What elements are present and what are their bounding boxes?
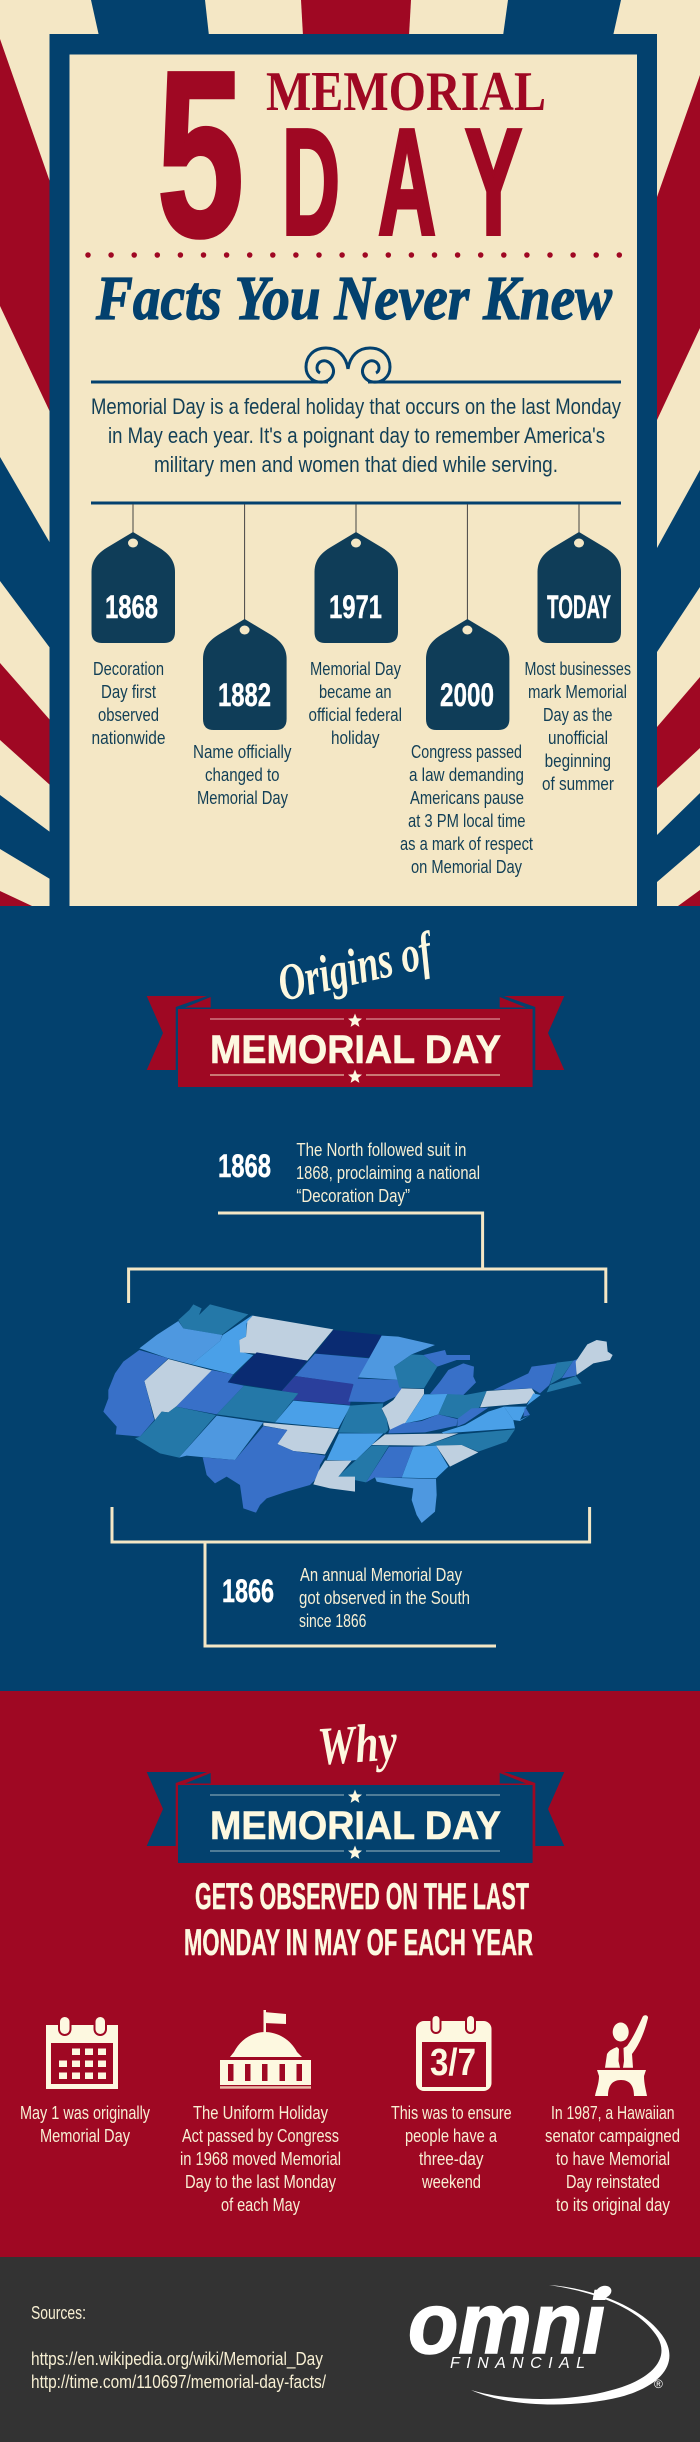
timeline item: 1882: Name officially (193, 742, 292, 762)
timeline item: 1882: changed to (205, 765, 280, 785)
text block: hawaiian senator: to have Memorial (556, 2149, 670, 2169)
callout: 1866: An annual Memorial Day (300, 1565, 462, 1585)
text block: introduction: military men and women that died while serving. (154, 452, 558, 477)
banner: Memorial Day (red): MEMORIAL DAY (210, 1028, 501, 1072)
text block: hawaiian senator: Day reinstated (566, 2172, 660, 2192)
panel: title frame (50, 34, 657, 914)
timeline item: today: beginning (545, 751, 611, 771)
banner: Memorial Day (blue) (147, 1772, 564, 1863)
icon: calendar 3/7 (416, 2015, 492, 2091)
heading: DAY: Y (465, 97, 522, 266)
timeline item: today: unofficial (548, 728, 608, 748)
timeline item: 2000: 2000 (440, 677, 494, 713)
timeline item: 1868: Day first (101, 682, 156, 702)
callout: 1868: 1868 (218, 1148, 271, 1184)
text block: three-day weekend (391, 2103, 512, 2192)
text block: three-day weekend: weekend (421, 2172, 481, 2192)
timeline item: 2000: Americans pause (410, 788, 524, 808)
text block: uniform holiday act: of each May (221, 2195, 300, 2215)
logo: omni financial: FINANCIAL (450, 2355, 585, 2372)
text block: may 1: May 1 was originally (20, 2103, 150, 2123)
text block: introduction: in May each year. It's a poignant day to remember America's (108, 423, 605, 448)
timeline item: 2000 (400, 504, 533, 877)
text block: may 1: Memorial Day (40, 2126, 130, 2146)
dotted divider (88, 252, 620, 258)
heading: DAY: A (378, 97, 436, 266)
connector: upper bracket (129, 1213, 606, 1303)
timeline item: today: Day as the (543, 705, 612, 725)
timeline item: 1868: observed (98, 705, 159, 725)
text block: uniform holiday act: in 1968 moved Memorial (180, 2149, 341, 2169)
timeline item: 2000: a law demanding (409, 765, 524, 785)
text block: may 1 (20, 2103, 150, 2146)
timeline item: 1868: 1868 (105, 589, 158, 625)
timeline rail (91, 502, 621, 504)
logo: omni financial: omni (408, 2276, 607, 2372)
timeline item: today: mark Memorial (528, 682, 627, 702)
text block: uniform holiday act (180, 2103, 341, 2215)
timeline item: 2000: Congress passed (411, 742, 522, 762)
banner: Memorial Day (red) (147, 996, 564, 1087)
timeline item: 1971: holiday (331, 728, 380, 748)
text block: sources (31, 2303, 326, 2392)
text block: uniform holiday act: Day to the last Monday (185, 2172, 336, 2192)
panel: origins section background (0, 906, 700, 1691)
heading: Why: Why (316, 1711, 400, 1777)
connector: lower bracket (112, 1507, 590, 1646)
timeline item: 2000: at 3 PM local time (408, 811, 526, 831)
heading: DAY: D (282, 97, 340, 266)
timeline item: 1971 (308, 504, 402, 748)
callout: 1866 (222, 1565, 470, 1631)
panel: sunburst background (0, 0, 700, 910)
timeline item: 2000: as a mark of respect (400, 834, 533, 854)
icon: calendar 3/7: 3/7 (430, 2042, 476, 2084)
callout: 1866: got observed in the South (299, 1588, 470, 1608)
timeline item: 1882 (193, 504, 292, 808)
ornament: swirl divider (91, 348, 621, 382)
icon: capitol building (220, 2010, 311, 2089)
timeline item: 1971: Memorial Day (310, 659, 401, 679)
text block: sources: Sources: (31, 2303, 86, 2323)
panel: footer background (0, 2257, 700, 2442)
text block: introduction (91, 394, 621, 477)
text block: uniform holiday act: The Uniform Holiday (193, 2103, 328, 2123)
icon: senator at podium (595, 2015, 648, 2096)
timeline item: 1971: 1971 (329, 589, 382, 625)
text block: three-day weekend: three-day (419, 2149, 484, 2169)
banner: Memorial Day (blue): MEMORIAL DAY (210, 1804, 501, 1848)
timeline item: today: of summer (542, 774, 614, 794)
callout: 1868: 1868, proclaiming a national (296, 1163, 480, 1183)
text block: three-day weekend: This was to ensure (391, 2103, 512, 2123)
timeline item: today (524, 504, 631, 794)
timeline item: 1882: 1882 (218, 677, 271, 713)
heading: gets observed (184, 1876, 533, 1963)
text block: sources: https://en.wikipedia.org/wiki/Memorial_Day (31, 2349, 323, 2370)
heading: number 5: 5 (157, 22, 244, 286)
callout: 1866: 1866 (222, 1573, 274, 1609)
callout: 1868: “Decoration Day” (296, 1186, 410, 1206)
logo: omni financial (408, 2276, 669, 2405)
timeline item: today: TODAY (547, 589, 611, 625)
callout: 1868 (218, 1140, 480, 1206)
timeline item: 1971: became an (319, 682, 392, 702)
timeline item: 1971: official federal (308, 705, 402, 725)
text block: hawaiian senator: to its original day (556, 2195, 670, 2215)
text block: uniform holiday act: Act passed by Congress (182, 2126, 339, 2146)
timeline item: 1868: nationwide (92, 728, 166, 748)
text block: three-day weekend: people have a (405, 2126, 498, 2146)
timeline item: 1868: Decoration (93, 659, 164, 679)
panel: why section background (0, 1691, 700, 2257)
timeline item: 1868 (92, 504, 175, 748)
heading: MEMORIAL: MEMORIAL (266, 61, 546, 123)
callout: 1868: The North followed suit in (296, 1140, 466, 1160)
timeline item: 2000: on Memorial Day (411, 857, 522, 877)
text block: sources: http://time.com/110697/memorial-day-facts/ (31, 2372, 326, 2392)
callout: 1866: since 1866 (299, 1611, 366, 1631)
icon: calendar grid (46, 2016, 118, 2089)
timeline item: today: Most businesses (524, 659, 631, 679)
timeline item: 1882: Memorial Day (197, 788, 288, 808)
text block: hawaiian senator (545, 2103, 680, 2215)
heading: DAY (282, 97, 522, 266)
map: United States (103, 1304, 613, 1523)
heading: Origins of: Origins of (272, 921, 441, 1013)
logo: omni financial: ® (654, 2377, 663, 2391)
heading: Facts You Never Knew: Facts You Never Knew (95, 265, 613, 333)
